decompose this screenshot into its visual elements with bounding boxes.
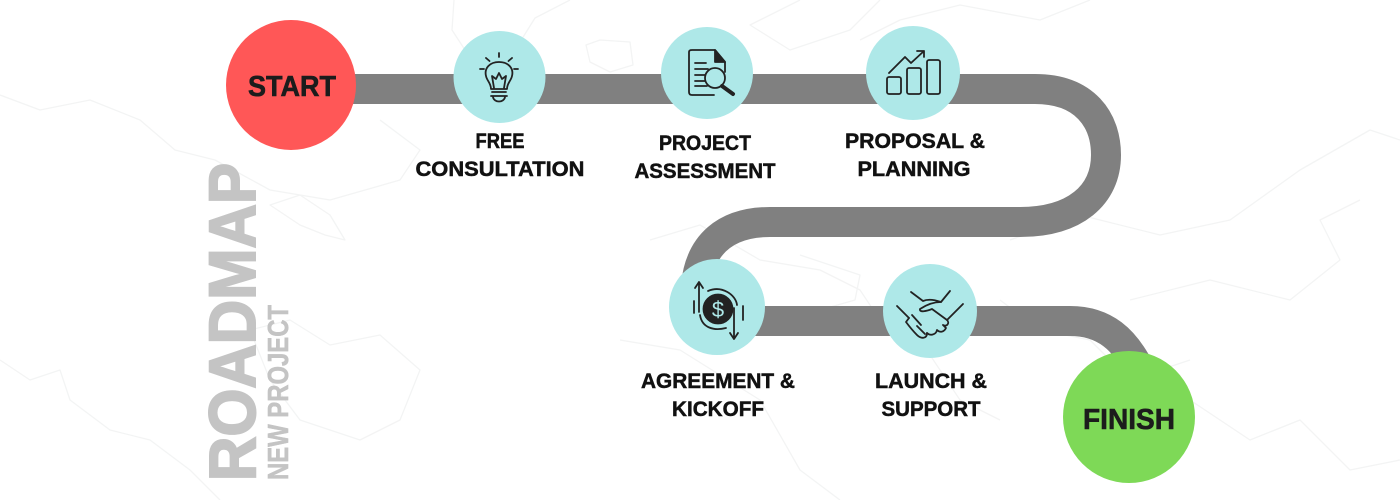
- icon: dollar with arrows: [694, 282, 743, 339]
- icon: handshake: [897, 291, 963, 338]
- label: FREE: [476, 130, 524, 153]
- label: PROJECT: [659, 132, 751, 155]
- step: proposal and planning: [845, 26, 985, 181]
- finish marker: FINISH: [1083, 404, 1175, 436]
- step: project assessment: [634, 27, 776, 183]
- label: KICKOFF: [672, 398, 764, 421]
- icon: bar chart with arrow: [887, 51, 940, 94]
- circle badge: [883, 264, 977, 358]
- icon: document with magnifier: [689, 50, 733, 95]
- start marker: START: [248, 71, 336, 103]
- step: free consultation: [416, 31, 584, 181]
- dollar sign: $: [712, 297, 724, 322]
- label: ASSESSMENT: [634, 160, 776, 183]
- label: AGREEMENT &: [641, 370, 795, 393]
- icon: light bulb: [480, 53, 518, 102]
- vertical title: roadmap: ROADMAP: [195, 163, 269, 481]
- label: SUPPORT: [882, 398, 981, 421]
- circle badge: [866, 26, 960, 120]
- label: PROPOSAL &: [845, 130, 985, 153]
- road path: [300, 89, 1140, 370]
- step: agreement and kickoff: [641, 259, 795, 421]
- start marker: [226, 20, 356, 150]
- step: launch and support: [875, 264, 987, 421]
- label: PLANNING: [858, 158, 970, 181]
- circle badge: [661, 27, 753, 119]
- label: LAUNCH &: [875, 370, 987, 393]
- label: CONSULTATION: [416, 158, 584, 181]
- vertical subtitle: new project: NEW PROJECT: [263, 305, 295, 480]
- finish marker: [1063, 351, 1195, 483]
- circle badge: [454, 31, 546, 123]
- circle badge: [669, 259, 765, 355]
